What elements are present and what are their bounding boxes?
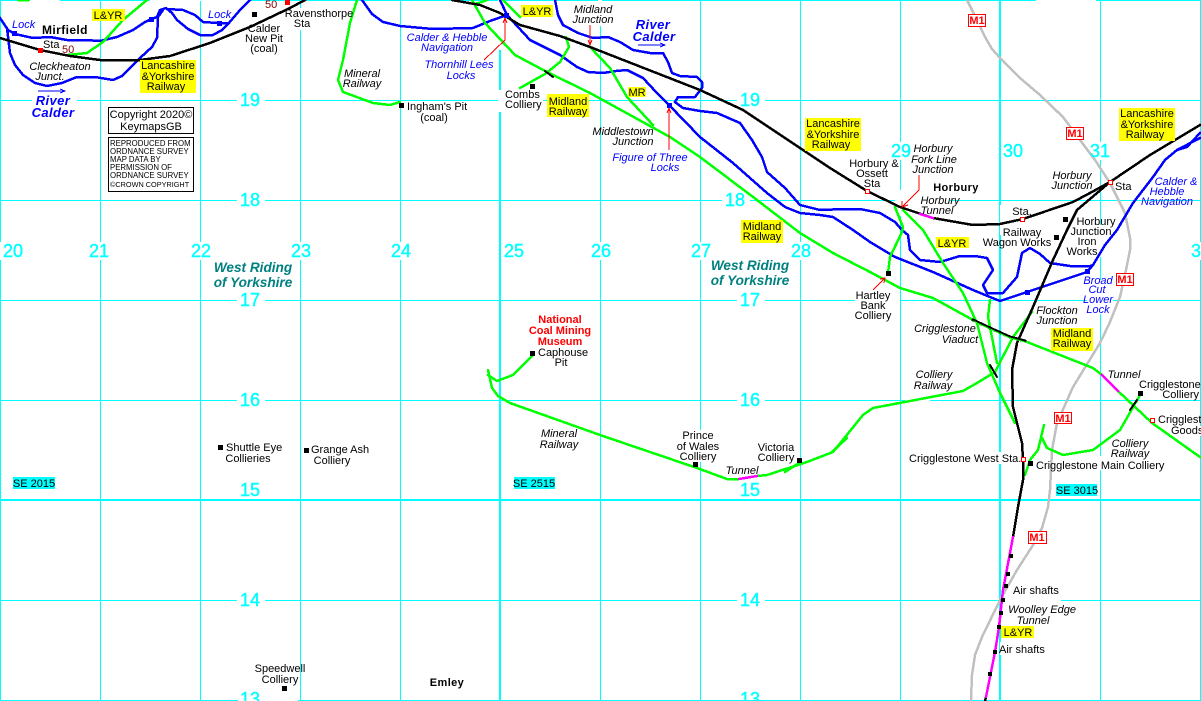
stations and collieries labels: Colliery [758,452,795,464]
junction and railway feature labels: Midland [574,4,613,16]
junction and railway feature labels: Colliery [1112,438,1150,450]
grid reference labels: SE 2515 [513,478,555,490]
place names: Mirfield [42,23,88,37]
junction and railway feature labels: Tunnel [726,465,759,477]
stations and collieries labels: Grange Ash [311,444,369,456]
yellow railway labels: &Yorkshire [807,129,859,141]
yellow railway labels: L&YR [938,238,966,250]
stations and collieries labels: Sta [294,18,311,30]
stations and collieries labels: Air shafts [999,644,1045,656]
junction and railway feature labels: Horbury [1052,170,1093,182]
M1 motorway [967,0,1130,700]
stations and collieries labels: Sta [864,178,881,190]
grid numbers: 24 [391,241,411,261]
M1 signs: M1 [969,15,985,27]
copyright box: KeymapsGB [120,121,182,133]
museum label: Coal Mining [529,325,591,337]
ordnance survey notice: ©CROWN COPYRIGHT [110,180,190,189]
stations and collieries labels: Crigglestone [1139,379,1201,391]
junction and railway feature labels: Railway [914,380,954,392]
stations and collieries labels: Victoria [758,442,795,454]
grid numbers: 14 [240,590,260,610]
junction and railway feature labels: Horbury [913,143,954,155]
waterway labels: Locks [447,70,476,82]
waterway labels [12,9,1197,316]
grid numbers: 23 [291,241,311,261]
waterway labels: Lock [12,19,36,31]
place names: Horbury [933,182,979,194]
waterway labels: Locks [651,162,680,174]
yellow railway labels: Railway [549,106,588,118]
stations and collieries labels: of Wales [677,441,720,453]
stations and collieries labels: Wagon Works [983,237,1052,249]
stations and collieries labels: Caphouse [538,347,588,359]
stations and collieries labels: (coal) [250,43,278,55]
river labels: Calder [32,105,75,120]
stations and collieries labels: Pit [555,357,567,369]
yellow railway labels: &Yorkshire [1121,119,1173,131]
midland and mineral railways [18,0,1200,479]
copyright box: Copyright 2020© [110,109,192,121]
waterway labels: Cut [1088,284,1106,296]
copyright box [108,108,194,134]
grid reference labels: SE 3015 [1056,485,1098,497]
ordnance survey notice: MAP DATA BY [110,155,161,164]
yellow railway labels: Lancashire [806,118,860,130]
county labels [214,258,790,290]
grid numbers: 25 [504,241,524,261]
yellow railway labels: Lancashire [141,60,195,72]
waterway labels: Hebble [1150,186,1184,198]
museum label: National [538,314,582,326]
county labels: of Yorkshire [214,275,293,290]
stations and collieries labels: Shuttle Eye [226,442,282,454]
junction and railway feature labels: Junction [1036,315,1077,327]
junction and railway feature labels: Flockton [1036,305,1078,317]
junction and railway feature labels: Horbury [920,195,961,207]
M1 signs: M1 [1067,128,1083,140]
grid reference labels [13,477,1098,497]
stations and collieries labels: Iron [1078,236,1096,248]
river labels: River [36,93,71,108]
waterway labels: Calder & Hebble [407,32,487,44]
stations and collieries labels: Colliery [505,99,542,111]
M1 signs: M1 [1029,532,1045,544]
stations and collieries labels: Colliery [1162,389,1199,401]
place names [42,23,979,689]
grid numbers: 16 [240,390,260,410]
waterway labels: Lock [1086,304,1110,316]
river labels: Calder [633,29,676,44]
stations and collieries labels: Prince [682,430,714,442]
county labels: of Yorkshire [711,273,790,288]
junction and railway feature labels: Tunnel [921,205,954,217]
grid numbers: 3 [1191,241,1201,261]
junction and railway feature labels: Crigglestone [914,323,976,335]
stations and collieries labels: Colliery [314,455,351,467]
grid numbers: 18 [725,190,745,210]
grid numbers: 30 [1003,141,1023,161]
junction and railway feature labels: Tunnel [1017,615,1050,627]
junction and railway feature labels: Viaduct [942,334,979,346]
river labels: River [636,17,671,32]
stations and collieries labels: 50 [62,44,74,56]
stations and collieries labels: New Pit [245,33,283,45]
stations and collieries labels: Collieries [225,453,271,465]
county labels: West Riding [711,258,790,273]
junction and railway feature labels: Colliery [916,369,954,381]
waterway labels: Navigation [1141,196,1193,208]
river direction arrows [38,43,665,93]
stations and collieries labels: Colliery [262,674,299,686]
stations and collieries labels: Air shafts [1013,585,1059,597]
yellow railway labels: Railway [812,139,851,151]
stations and collieries labels: Bank [860,300,886,312]
yellow railway labels: &Yorkshire [142,71,194,83]
ordnance survey notice: ORDNANCE SURVEY [110,147,190,156]
stations and collieries labels: Colliery [680,451,717,463]
M1 signs [968,14,1134,544]
stations and collieries labels: Railway [1003,227,1042,239]
grid numbers: 28 [791,241,811,261]
ordnance survey notice: REPRODUCED FROM [110,139,191,148]
grid numbers: 17 [740,290,760,310]
waterway labels: Thornhill Lees [424,59,494,71]
waterway labels: Lower [1083,294,1114,306]
yellow railway labels: Midland [549,96,587,108]
yellow railway labels: Midland [743,221,781,233]
junction and railway feature labels: Railway [343,78,383,90]
grid numbers: 15 [240,480,260,500]
yellow railway labels: Railway [1053,338,1092,350]
junction and railway feature labels: Middlestown [592,126,654,138]
stations and collieries labels: Crigglestone West Sta. [909,453,1021,465]
yellow railway labels: MR [628,87,646,99]
stations and collieries labels: Crigglest [1158,414,1201,426]
stations and collieries labels: Combs [505,89,540,101]
grid numbers: 19 [740,90,760,110]
ordnance survey notice: PERMISSION OF [110,163,172,172]
grid numbers: 21 [89,241,109,261]
stations and collieries labels: Ravensthorpe [285,8,353,20]
grid reference labels: SE 2015 [13,478,55,490]
waterway labels: Calder & [1155,176,1197,188]
grid numbers: 27 [691,241,711,261]
stations and collieries labels: Hartley [856,290,891,302]
stations and collieries labels: (coal) [420,112,448,124]
stations and collieries labels: Sta [43,39,60,51]
place names: Emley [430,677,465,689]
junction and railway feature labels: Junction [912,164,953,176]
junction and railway feature labels: Woolley Edge [1008,604,1076,616]
stations and collieries labels: Speedwell [255,663,305,675]
junction and railway feature labels: Mineral [541,428,578,440]
yellow railway labels: L&YR [94,10,122,22]
grid numbers: 14 [740,590,760,610]
junction and railway feature labels: Railway [1111,448,1151,460]
yellow railway labels: Railway [147,81,186,93]
grid numbers: 29 [891,141,911,161]
museum label: Museum [538,336,583,348]
yellow railway labels: L&YR [523,6,551,18]
M1 signs: M1 [1117,274,1133,286]
ordnance survey notice [108,138,194,192]
stations and collieries labels: Calder [248,23,281,35]
grid numbers: 18 [240,190,260,210]
stations and collieries labels: Colliery [855,310,892,322]
junction and railway feature labels: Junction [1051,180,1092,192]
rivers and canals [0,0,1200,301]
museum label [529,314,591,348]
junction and railway feature labels: Cleckheaton [29,61,91,73]
waterway labels: Broad [1083,275,1114,287]
stations and collieries labels: Junction [1071,226,1111,238]
tunnels [739,214,1118,697]
junction and railway feature labels: Tunnel [1108,369,1141,381]
waterway labels: Lock [208,9,232,21]
grid numbers: 31 [1090,141,1110,161]
stations and collieries labels: Crigglestone Main Colliery [1036,460,1165,472]
grid numbers: 17 [240,290,260,310]
junction and railway feature labels: Junction [572,14,613,26]
junction and railway feature labels: Mineral [344,68,381,80]
waterway labels: Navigation [421,42,473,54]
grid numbers: 16 [740,390,760,410]
viaduct [973,321,1025,342]
stations and collieries labels: Horbury & [849,158,899,170]
county labels: West Riding [214,260,293,275]
junction and railway feature labels: Junction [612,136,653,148]
stations and collieries labels: Works [1067,246,1098,258]
junction and railway feature labels: Junct. [34,71,65,83]
yellow railway labels: Railway [743,231,782,243]
grid numbers: 15 [740,480,760,500]
waterway labels: Figure of Three [612,152,688,164]
river labels [32,17,676,120]
stations and collieries labels: Sta [1115,181,1132,193]
M1 signs: M1 [1055,413,1071,425]
stations and collieries labels: Horbury [1076,216,1116,228]
grid numbers: 20 [3,241,23,261]
red arrows [484,18,919,290]
stations and collieries labels: Sta. [1012,206,1032,218]
junction and railway feature labels: Railway [540,439,580,451]
junction and railway feature labels: Fork Line [911,154,957,166]
grid numbers: 19 [240,90,260,110]
yellow railway labels: Railway [1126,129,1165,141]
grid numbers: 26 [591,241,611,261]
stations and collieries labels: Ossett [856,168,888,180]
ordnance survey notice: ORDNANCE SURVEY [110,171,190,180]
yellow railway labels: Midland [1053,328,1091,340]
yellow railway labels: Lancashire [1120,108,1174,120]
grid numbers: 22 [191,241,211,261]
yellow railway labels: L&YR [1004,627,1032,639]
stations and collieries labels: Ingham's Pit [407,101,467,113]
